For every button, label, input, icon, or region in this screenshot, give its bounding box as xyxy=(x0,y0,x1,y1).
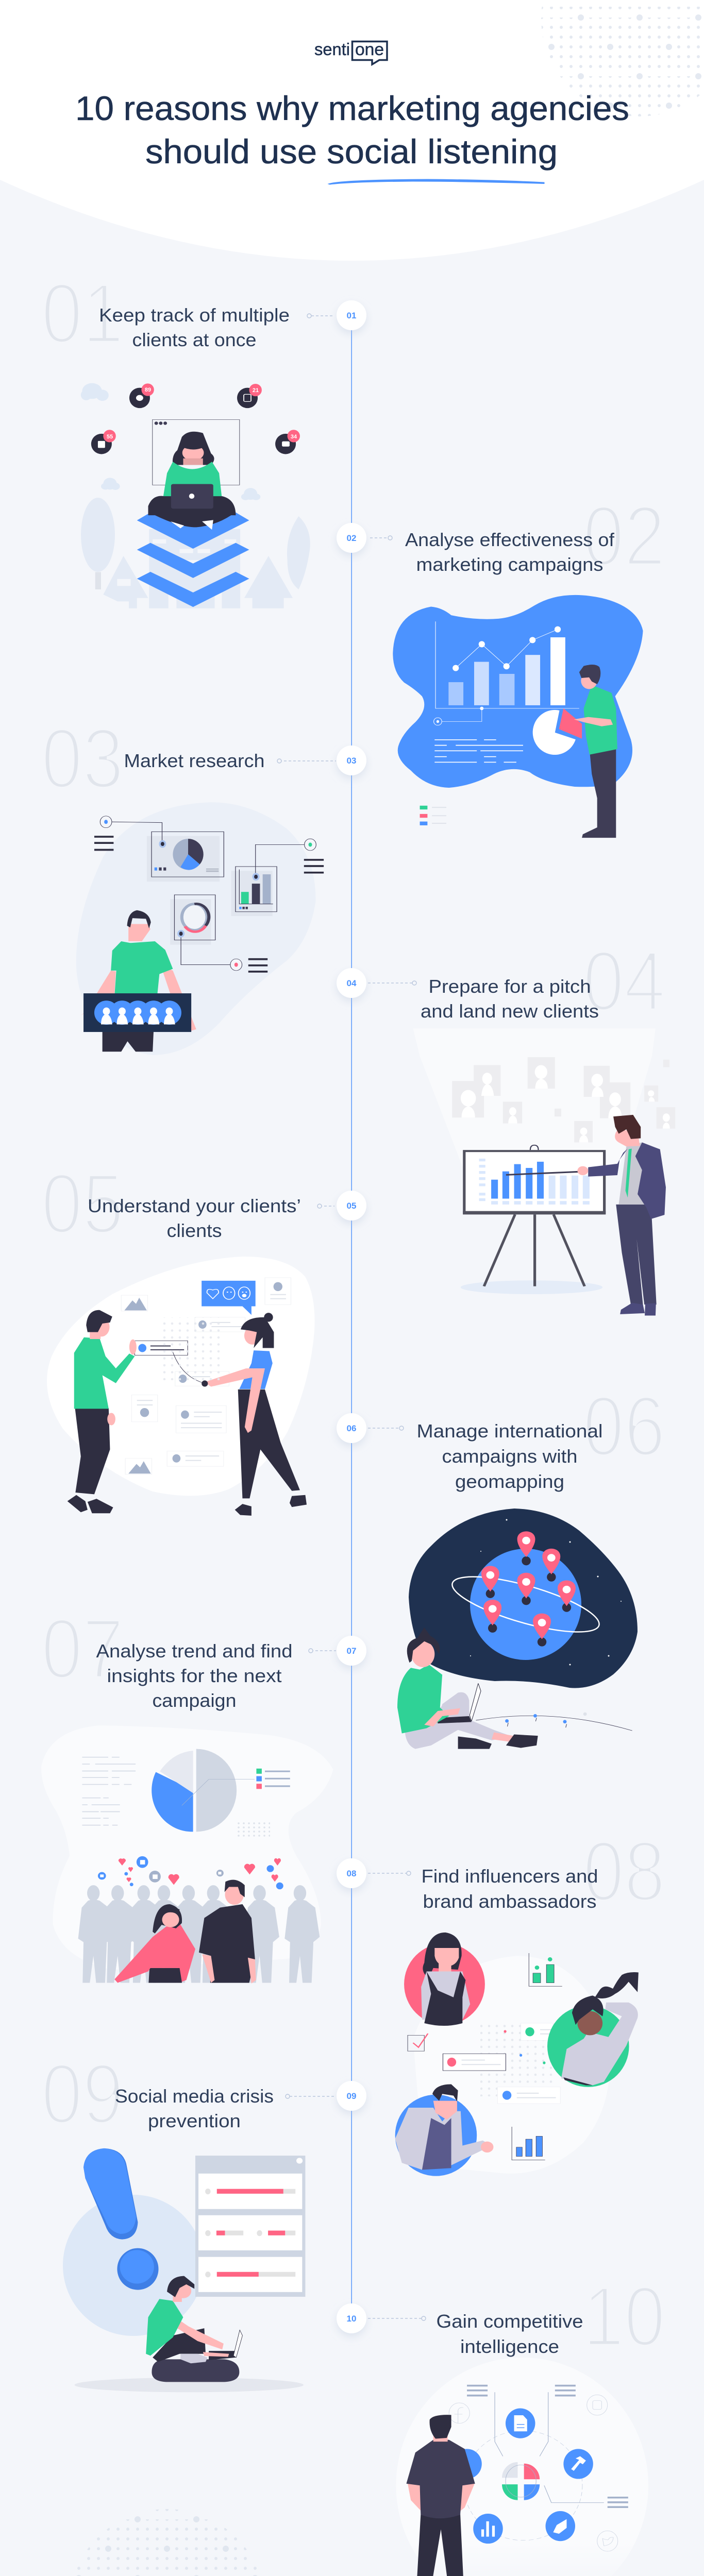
floating cards xyxy=(121,1278,291,1475)
blue icons xyxy=(452,2409,593,2544)
big background numbers: 08 xyxy=(583,1824,665,1919)
dashed orbit xyxy=(464,2431,582,2540)
sitting woman xyxy=(397,1628,632,1749)
night blob xyxy=(409,1509,638,1688)
illustration 3: market research xyxy=(76,802,324,1055)
man holding board xyxy=(81,910,196,1052)
heading 03: Market research xyxy=(124,750,265,771)
pale blob xyxy=(76,802,316,1055)
black sweater man xyxy=(199,1880,256,1984)
heading 06 xyxy=(416,1420,603,1492)
illustration 9: crisis prevention xyxy=(63,2148,305,2392)
title xyxy=(75,89,629,171)
illustration 1: woman on layers xyxy=(81,383,310,608)
logo: one xyxy=(355,40,384,59)
timeline nodes: 07 xyxy=(347,1646,356,1656)
title: should use social listening xyxy=(145,132,558,171)
small bar chart xyxy=(512,2127,545,2160)
man from behind xyxy=(406,2415,475,2576)
white blob xyxy=(47,1257,315,1496)
quadrant chart xyxy=(502,2462,540,2500)
timeline nodes: 02 xyxy=(347,533,356,543)
man with chart xyxy=(574,665,617,838)
pale blob xyxy=(413,1956,610,2174)
heading 04 xyxy=(421,976,599,1022)
man in blue circle xyxy=(395,2084,493,2176)
exclamation mark xyxy=(83,2148,159,2290)
illustration 4: pitch presentation xyxy=(413,1028,675,1316)
man on bean bag xyxy=(146,2276,242,2382)
big background numbers: 09 xyxy=(41,2046,124,2141)
dot pattern: bottom left xyxy=(68,2509,266,2576)
pie chart xyxy=(82,1749,290,1832)
monitoring card xyxy=(195,2156,305,2297)
illustration 8: influencers xyxy=(395,1933,639,2176)
big background numbers xyxy=(41,266,665,2364)
illustration 1: woman on layers: 34 xyxy=(291,434,297,440)
crowd silhouettes xyxy=(78,1885,320,1983)
dot pattern: top right xyxy=(541,0,704,116)
stars xyxy=(470,1519,622,1665)
dot grid: trends xyxy=(237,1821,270,1839)
reactions xyxy=(98,1856,283,1889)
heading 05: clients xyxy=(167,1220,222,1241)
timeline nodes: 09 xyxy=(347,2091,356,2101)
presenter xyxy=(577,1115,666,1316)
heading 02: Analyse effectiveness of xyxy=(405,529,615,550)
timeline nodes xyxy=(337,300,366,2333)
heading 10 xyxy=(436,2311,583,2357)
chart xyxy=(434,621,582,762)
title underline xyxy=(328,179,544,184)
big background numbers: 10 xyxy=(583,2269,665,2364)
heading 02 xyxy=(405,529,615,575)
shadow xyxy=(75,2378,304,2392)
heading 10: intelligence xyxy=(460,2336,559,2357)
timeline nodes: 05 xyxy=(347,1201,356,1211)
heading 06: Manage international xyxy=(416,1420,603,1442)
illustration 5: understanding clients xyxy=(47,1257,315,1516)
globe xyxy=(470,1549,581,1660)
big background numbers: 05 xyxy=(41,1156,124,1251)
spotlight xyxy=(413,1028,656,1166)
logo: senti xyxy=(314,40,350,59)
woman in green circle xyxy=(547,1972,639,2087)
heading 04: Prepare for a pitch xyxy=(429,976,591,997)
illustration 10: competitive intelligence xyxy=(387,2358,648,2576)
timeline nodes: 10 xyxy=(347,2314,356,2324)
illustration 1: woman on layers: 21 xyxy=(253,387,259,394)
big background numbers: 02 xyxy=(583,488,665,583)
blue blob xyxy=(393,595,643,788)
connectors and hamburgers xyxy=(94,816,324,972)
dashboards xyxy=(147,832,277,945)
pink sweater woman xyxy=(114,1904,195,1983)
dot grid: clients xyxy=(161,1317,223,1380)
timeline nodes: 04 xyxy=(347,978,357,988)
heading 08 xyxy=(422,1866,598,1912)
heading 08: Find influencers and xyxy=(422,1866,598,1887)
charts and cards xyxy=(408,1953,562,2104)
big background numbers: 06 xyxy=(583,1379,665,1473)
heading 01: clients at once xyxy=(132,329,257,350)
bar chart xyxy=(479,1159,590,1205)
logo xyxy=(314,40,387,64)
heading 07: campaign xyxy=(153,1690,236,1711)
illustration 1: woman on layers: 89 xyxy=(145,387,151,393)
big background numbers: 03 xyxy=(41,711,124,806)
heading 07 xyxy=(96,1640,293,1711)
woman xyxy=(202,1313,307,1516)
heading 09 xyxy=(115,2086,274,2131)
big background numbers: 04 xyxy=(583,934,665,1028)
illustration 1: woman on layers: 55 xyxy=(107,434,113,440)
heading 06: geomapping xyxy=(455,1471,564,1492)
outline social icons xyxy=(449,2395,618,2551)
heading 09: prevention xyxy=(148,2110,241,2131)
timeline nodes: 01 xyxy=(347,311,356,320)
white header arc xyxy=(0,0,704,261)
heading 10: Gain competitive xyxy=(436,2311,583,2332)
speech bubble xyxy=(202,1281,256,1315)
illustration 6: geomapping xyxy=(397,1509,638,1749)
big background numbers: 01 xyxy=(41,266,124,361)
illustration 2: campaign chart blob xyxy=(393,595,643,838)
easel xyxy=(461,1145,606,1294)
pale circle xyxy=(63,2195,204,2336)
legend xyxy=(420,806,446,825)
title: 10 reasons why marketing agencies xyxy=(75,89,629,127)
heading 01: Keep track of multiple xyxy=(99,304,290,326)
heading 08: brand ambassadors xyxy=(423,1891,597,1912)
dashed connectors xyxy=(277,314,426,2320)
portraits xyxy=(452,1057,675,1142)
orbit xyxy=(447,1566,604,1643)
woman in pink circle xyxy=(404,1933,485,2026)
pale circle xyxy=(396,2358,648,2576)
heading 01 xyxy=(99,304,290,350)
timeline nodes: 06 xyxy=(347,1423,356,1433)
man xyxy=(68,1310,204,1513)
timeline nodes: 03 xyxy=(347,756,356,766)
big background numbers: 07 xyxy=(41,1601,124,1696)
pale blob xyxy=(41,1725,333,1970)
connectors xyxy=(495,2392,604,2503)
social icon discs xyxy=(91,388,296,454)
heading 02: marketing campaigns xyxy=(416,554,603,575)
heading 07: insights for the next xyxy=(107,1665,281,1686)
timeline line xyxy=(351,315,352,2318)
heading 05 xyxy=(88,1195,301,1241)
pins xyxy=(481,1531,576,1647)
heading 04: and land new clients xyxy=(421,1001,599,1022)
timeline nodes: 08 xyxy=(347,1869,356,1878)
illustration 7: trends xyxy=(41,1725,333,1984)
menu bars xyxy=(467,2386,628,2507)
heading 07: Analyse trend and find xyxy=(96,1640,293,1662)
heading 09: Social media crisis xyxy=(115,2086,274,2107)
heading 05: Understand your clients’ xyxy=(88,1195,301,1216)
heading 06: campaigns with xyxy=(442,1446,577,1467)
